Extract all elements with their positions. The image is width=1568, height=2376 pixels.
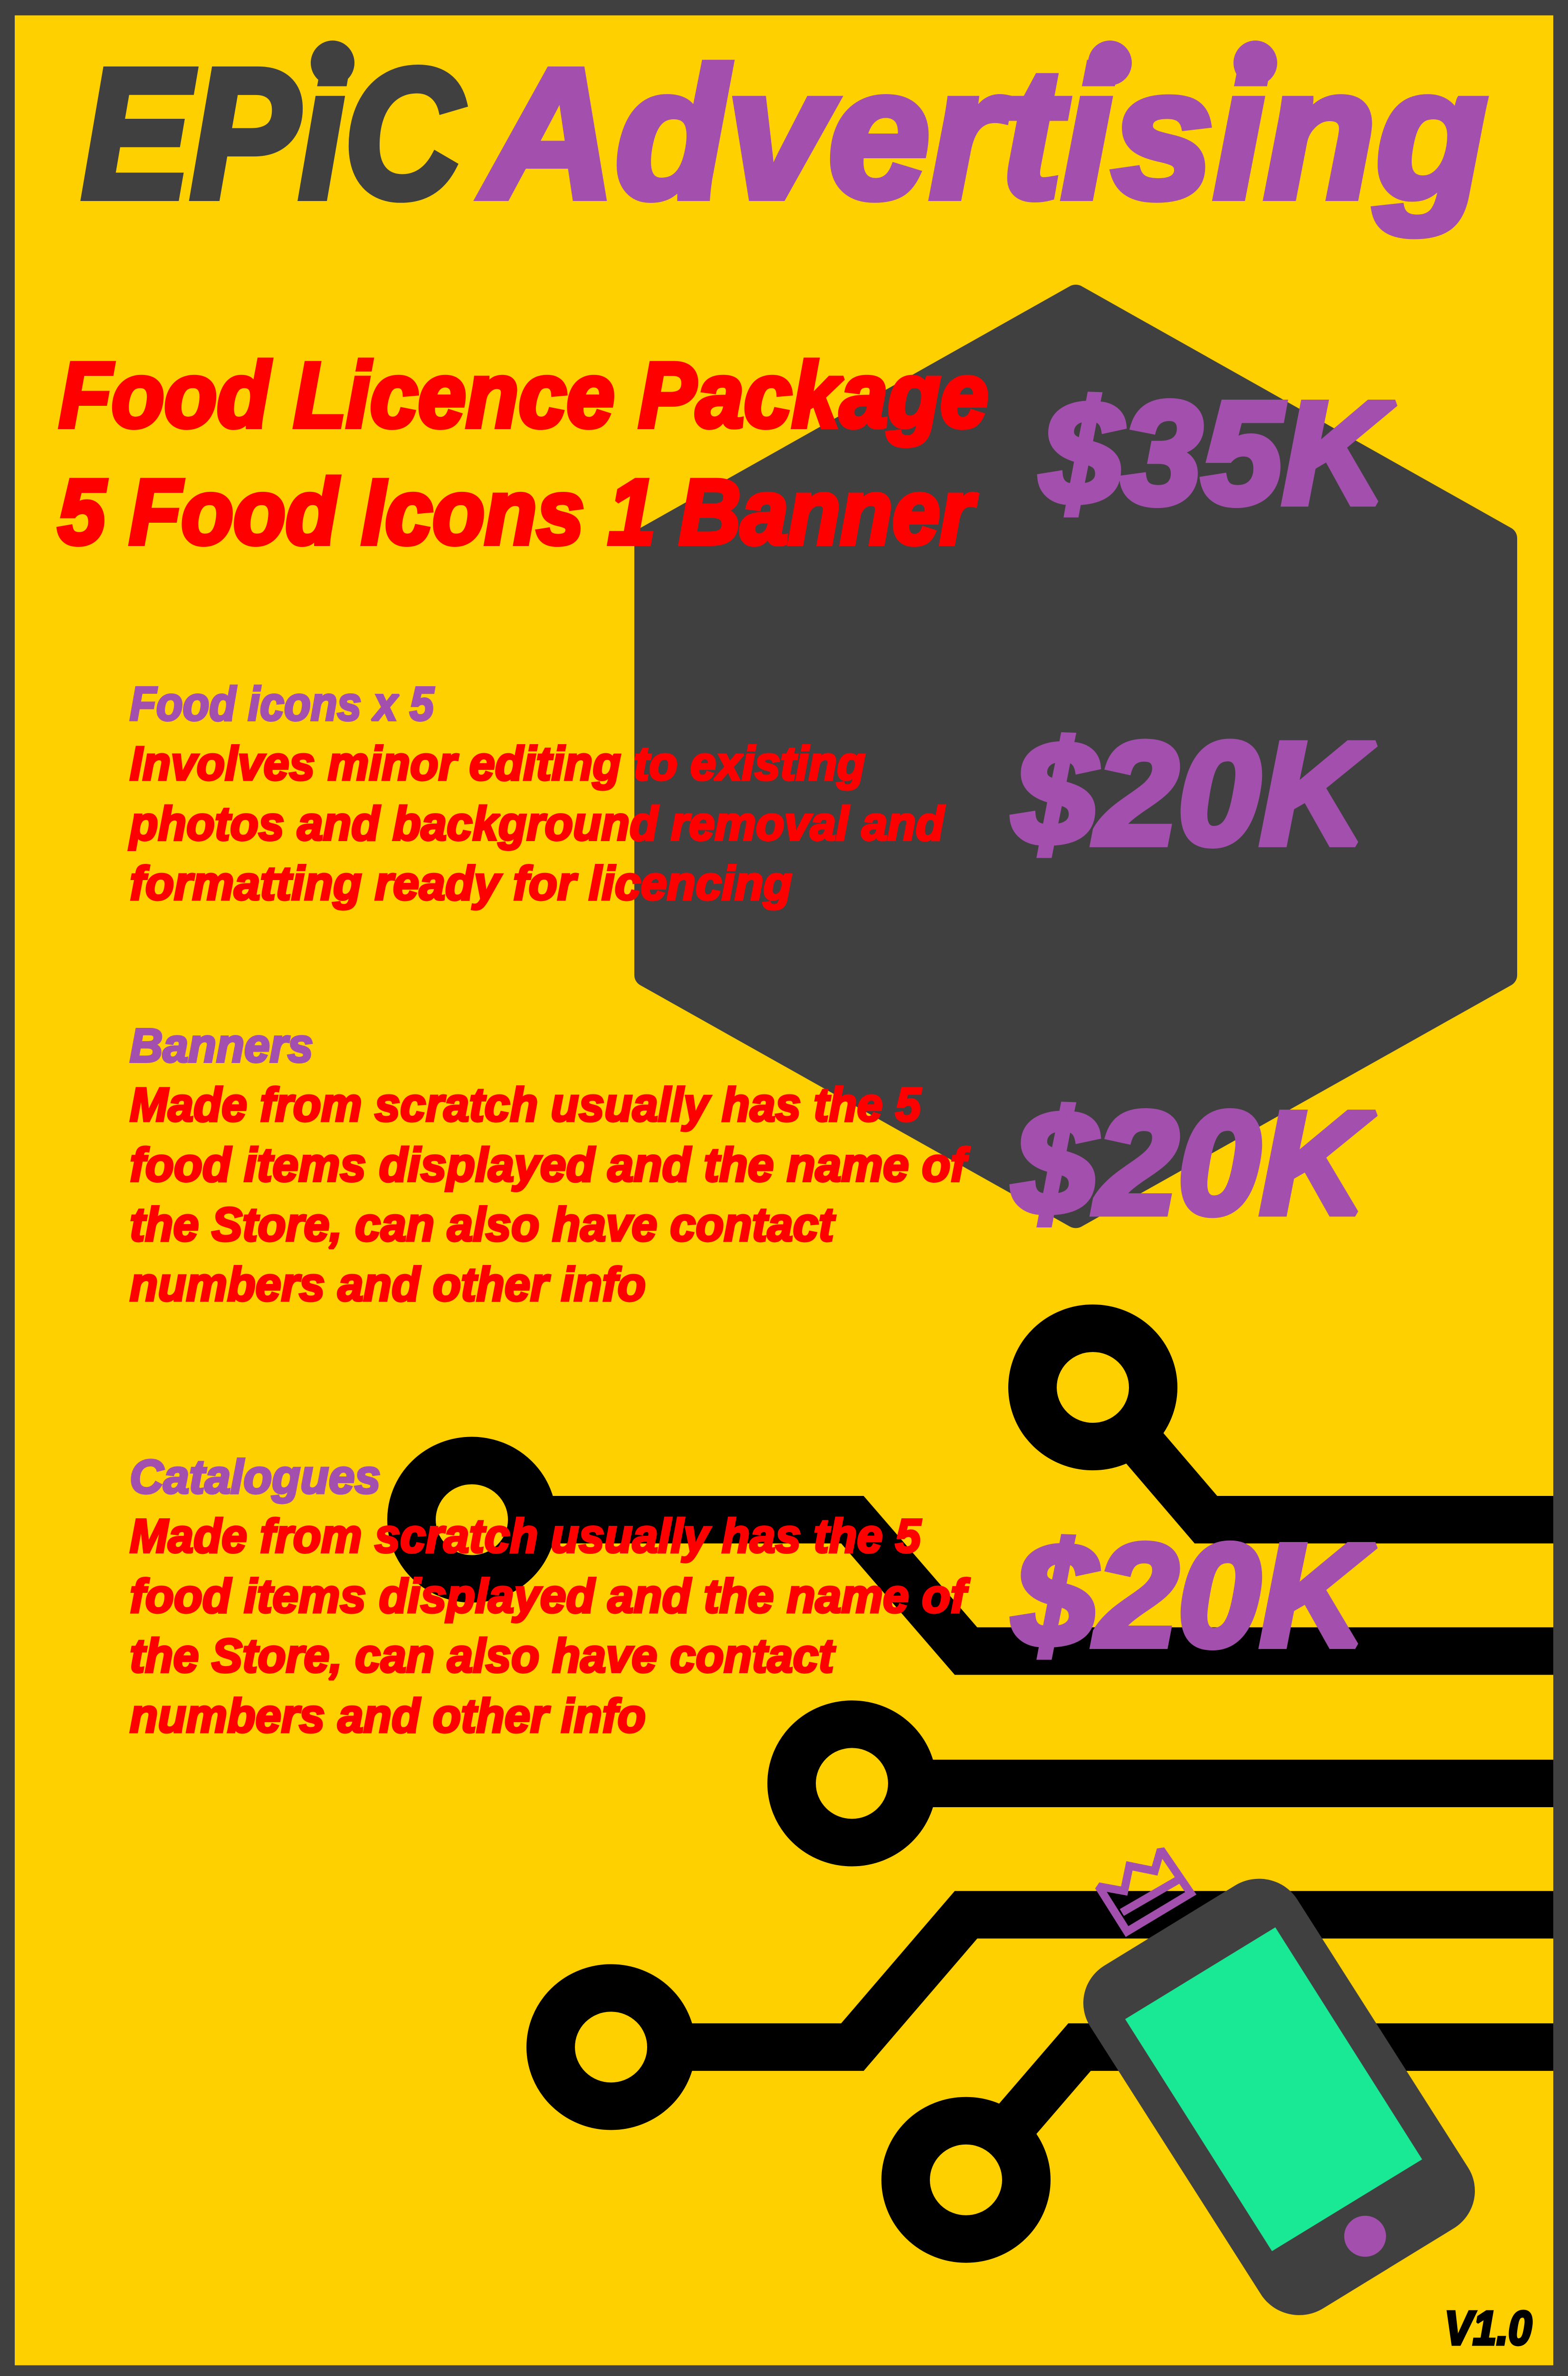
- title word: EPiC: EPiC: [82, 30, 464, 236]
- catalogues description: the Store, can also have contact: [130, 1630, 836, 1682]
- price: banners $20K: $20K: [1012, 1082, 1377, 1244]
- catalogues description: food items displayed and the name of: [130, 1570, 970, 1623]
- section: banners: [130, 1019, 970, 1311]
- phone home button: [1344, 2216, 1386, 2257]
- hexagon panel: [646, 297, 1505, 1217]
- banners description: the Store, can also have contact: [130, 1198, 836, 1251]
- circuit trace 3: [792, 1724, 1553, 1842]
- food icons heading: Food icons x 5: [130, 678, 435, 730]
- circuit trace 2: [411, 1461, 1553, 1651]
- banners description: Made from scratch usually has the 5: [130, 1079, 922, 1131]
- title: oversized i dots: [311, 40, 1277, 85]
- food icons description: Involves minor editing to existing: [130, 738, 865, 790]
- catalogues description: [130, 1510, 970, 1743]
- heading line 2: 5 Food Icons 1 Banner: [58, 460, 977, 564]
- circuit graphic: [411, 1328, 1553, 2239]
- icon: smartphone: [1066, 1862, 1492, 2332]
- catalogues description: Made from scratch usually has the 5: [130, 1510, 922, 1562]
- banners description: [130, 1079, 970, 1311]
- circuit trace 5: [906, 2047, 1553, 2239]
- price: food icons $20K: $20K: [1012, 712, 1377, 875]
- price: catalogues $20K: $20K: [1012, 1514, 1377, 1677]
- food icons description: [128, 738, 945, 910]
- phone screen: [1125, 1927, 1422, 2251]
- circuit trace 1: [1033, 1328, 1553, 1520]
- banners description: food items displayed and the name of: [130, 1139, 970, 1191]
- package heading: [58, 344, 988, 564]
- heading line 1: Food Licence Package: [59, 344, 988, 447]
- version label: V1.0: [1444, 2302, 1532, 2355]
- title: [82, 30, 1487, 237]
- icon: crown: [1099, 1849, 1191, 1932]
- section: catalogues: [130, 1451, 970, 1743]
- price: $35K: $35K: [1039, 372, 1397, 534]
- circuit trace 4: [551, 1915, 1553, 2106]
- catalogues heading: Catalogues: [130, 1451, 381, 1504]
- catalogues description: numbers and other info: [130, 1690, 646, 1743]
- banners description: numbers and other info: [130, 1258, 646, 1311]
- food icons description: formatting ready for licencing: [130, 857, 792, 910]
- section: food icons: [128, 678, 945, 910]
- phone body: [1066, 1862, 1492, 2332]
- banners heading: Banners: [130, 1019, 313, 1072]
- food icons description: photos and background removal and: [128, 798, 945, 850]
- title word: Advertising: Advertising: [478, 30, 1487, 237]
